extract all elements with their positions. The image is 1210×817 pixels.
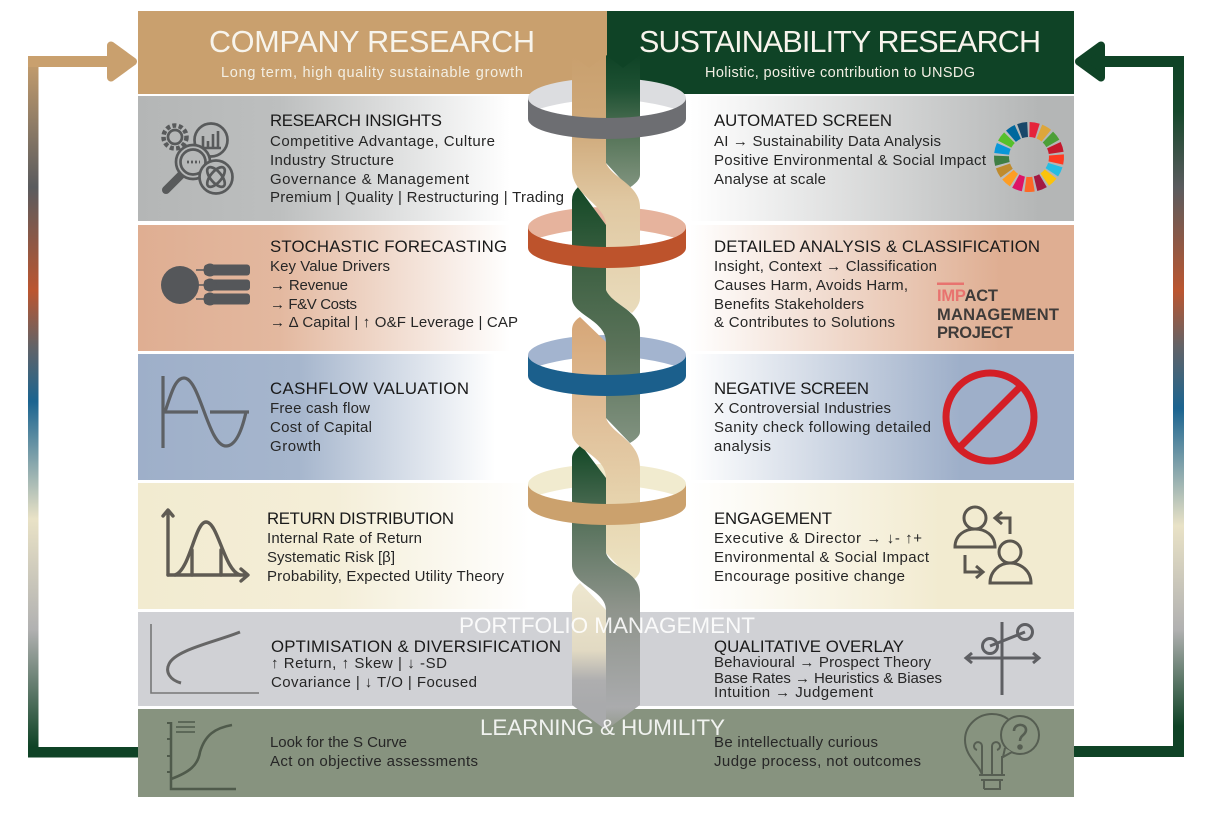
text block: → Δ Capital | ↑ O&F Leverage | CAP: [270, 314, 518, 331]
text block: [270, 258, 518, 331]
text block: [714, 530, 930, 585]
text block: [270, 400, 372, 455]
text block: [271, 655, 477, 691]
icon: sine wave: [163, 376, 249, 448]
text block: Systematic Risk [β]: [267, 549, 395, 566]
text block: Judge process, not outcomes: [714, 753, 921, 770]
ring 2 front: [528, 227, 686, 268]
text block: Key Value Drivers: [270, 258, 390, 275]
text block: [714, 654, 942, 701]
icon: light bulb with question: [965, 714, 1039, 789]
heading: OPTIMISATION & DIVERSIFICATION: [271, 637, 561, 656]
text block: Premium | Quality | Restructuring | Trading: [270, 189, 564, 206]
text block: Internal Rate of Return: [267, 530, 422, 547]
text block: Base Rates → Heuristics & Biases: [714, 670, 942, 687]
header: company research: Long term, high quality sustainable growth: [221, 65, 523, 81]
text block: X Controversial Industries: [714, 400, 891, 417]
heading: ENGAGEMENT: [714, 509, 832, 528]
text block: Governance & Management: [270, 171, 470, 188]
heading: portfolio management: PORTFOLIO MANAGEMENT: [459, 613, 755, 638]
icon: return distribution curve: [163, 510, 248, 581]
header: sustainability research: Holistic, positive contribution to UNSDG: [705, 65, 975, 81]
ring 3 back: [528, 335, 686, 375]
text block: Positive Environmental & Social Impact: [714, 152, 987, 169]
panel: learning left: [138, 709, 607, 797]
intertwined strands: [572, 55, 640, 730]
icon: crossed axes with nodes: [966, 622, 1039, 695]
text block: ↑ Return, ↑ Skew | ↓ -SD: [271, 655, 447, 672]
text block: Competitive Advantage, Culture: [270, 133, 495, 150]
arrow: right feedback loop: [1074, 46, 1184, 757]
panel: research insights: [138, 96, 607, 221]
text block: AI → Sustainability Data Analysis: [714, 133, 941, 150]
text block: Growth: [270, 438, 321, 455]
text block: Probability, Expected Utility Theory: [267, 568, 504, 585]
ring 1 back: [528, 78, 686, 118]
icon: value drivers: [161, 264, 250, 306]
ring 2 back: [528, 207, 686, 247]
panel: optimisation and diversification: [138, 612, 607, 706]
text block: Benefits Stakeholders: [714, 296, 864, 313]
heading: DETAILED ANALYSIS & CLASSIFICATION: [714, 237, 1040, 256]
text block: [270, 133, 564, 206]
panel: engagement: [607, 483, 1074, 609]
heading: AUTOMATED SCREEN: [714, 111, 892, 130]
text block: [714, 258, 937, 331]
logo: impact management project: [937, 282, 1059, 342]
text block: Covariance | ↓ T/O | Focused: [271, 674, 477, 691]
header: sustainability research: SUSTAINABILITY RESEARCH: [639, 25, 1041, 59]
header: company research: [138, 11, 607, 94]
icon: SDG wheel: [990, 118, 1068, 196]
text block: Insight, Context → Classification: [714, 258, 937, 275]
logo: impact management project: MANAGEMENT: [937, 306, 1059, 324]
logo: impact management project: PROJECT: [937, 324, 1013, 342]
ring 1 front: [528, 98, 686, 139]
heading: NEGATIVE SCREEN: [714, 379, 869, 398]
icon: S curve: [167, 722, 236, 789]
panel: detailed analysis and classification: [607, 225, 1074, 351]
arrow: left feedback loop: [28, 46, 138, 758]
heading: CASHFLOW VALUATION: [270, 379, 469, 398]
ring 4 front: [528, 484, 686, 525]
heading: RESEARCH INSIGHTS: [270, 111, 442, 130]
text block: Free cash flow: [270, 400, 370, 417]
icon: prohibited sign: [946, 373, 1034, 461]
text block: Causes Harm, Avoids Harm,: [714, 277, 908, 294]
text block: [714, 133, 987, 188]
text block: Executive & Director → ↓- ↑+: [714, 530, 922, 547]
heading: RETURN DISTRIBUTION: [267, 509, 454, 528]
text block: → Revenue: [270, 277, 348, 294]
panel: negative screen: [607, 354, 1074, 480]
panel: cashflow valuation: [138, 354, 607, 480]
icon: research cluster: [164, 124, 232, 194]
heading: learning and humility: LEARNING & HUMILITY: [480, 715, 725, 740]
text block: Encourage positive change: [714, 568, 905, 585]
icon: two people exchanging: [955, 507, 1031, 583]
panel: stochastic forecasting: [138, 225, 607, 351]
heading: QUALITATIVE OVERLAY: [714, 637, 904, 656]
header: company research: COMPANY RESEARCH: [209, 25, 535, 59]
text block: [714, 734, 921, 770]
text block: Look for the S Curve: [270, 734, 407, 751]
ring 3 front: [528, 355, 686, 396]
text block: [714, 400, 931, 455]
header: sustainability research: [607, 11, 1074, 94]
panel: automated screen: [607, 96, 1074, 221]
text block: & Contributes to Solutions: [714, 314, 895, 331]
text block: Behavioural → Prospect Theory: [714, 654, 932, 671]
text block: Be intellectually curious: [714, 734, 878, 751]
text block: [267, 530, 504, 585]
text block: Cost of Capital: [270, 419, 372, 436]
logo: impact management project: IMPACT: [937, 287, 998, 305]
text block: analysis: [714, 438, 771, 455]
panel: return distribution: [138, 483, 607, 609]
text block: Act on objective assessments: [270, 753, 478, 770]
text block: → F&V Costs: [270, 296, 357, 313]
panel: qualitative overlay: [607, 612, 1074, 706]
ring 4 back: [528, 464, 686, 504]
text block: Industry Structure: [270, 152, 394, 169]
text block: Environmental & Social Impact: [714, 549, 930, 566]
text block: Intuition → Judgement: [714, 684, 874, 701]
text block: Analyse at scale: [714, 171, 826, 188]
heading: STOCHASTIC FORECASTING: [270, 237, 507, 256]
text block: Sanity check following detailed: [714, 419, 931, 436]
text block: [270, 734, 478, 770]
icon: efficient frontier: [151, 624, 259, 693]
panel: learning right: [607, 709, 1074, 797]
